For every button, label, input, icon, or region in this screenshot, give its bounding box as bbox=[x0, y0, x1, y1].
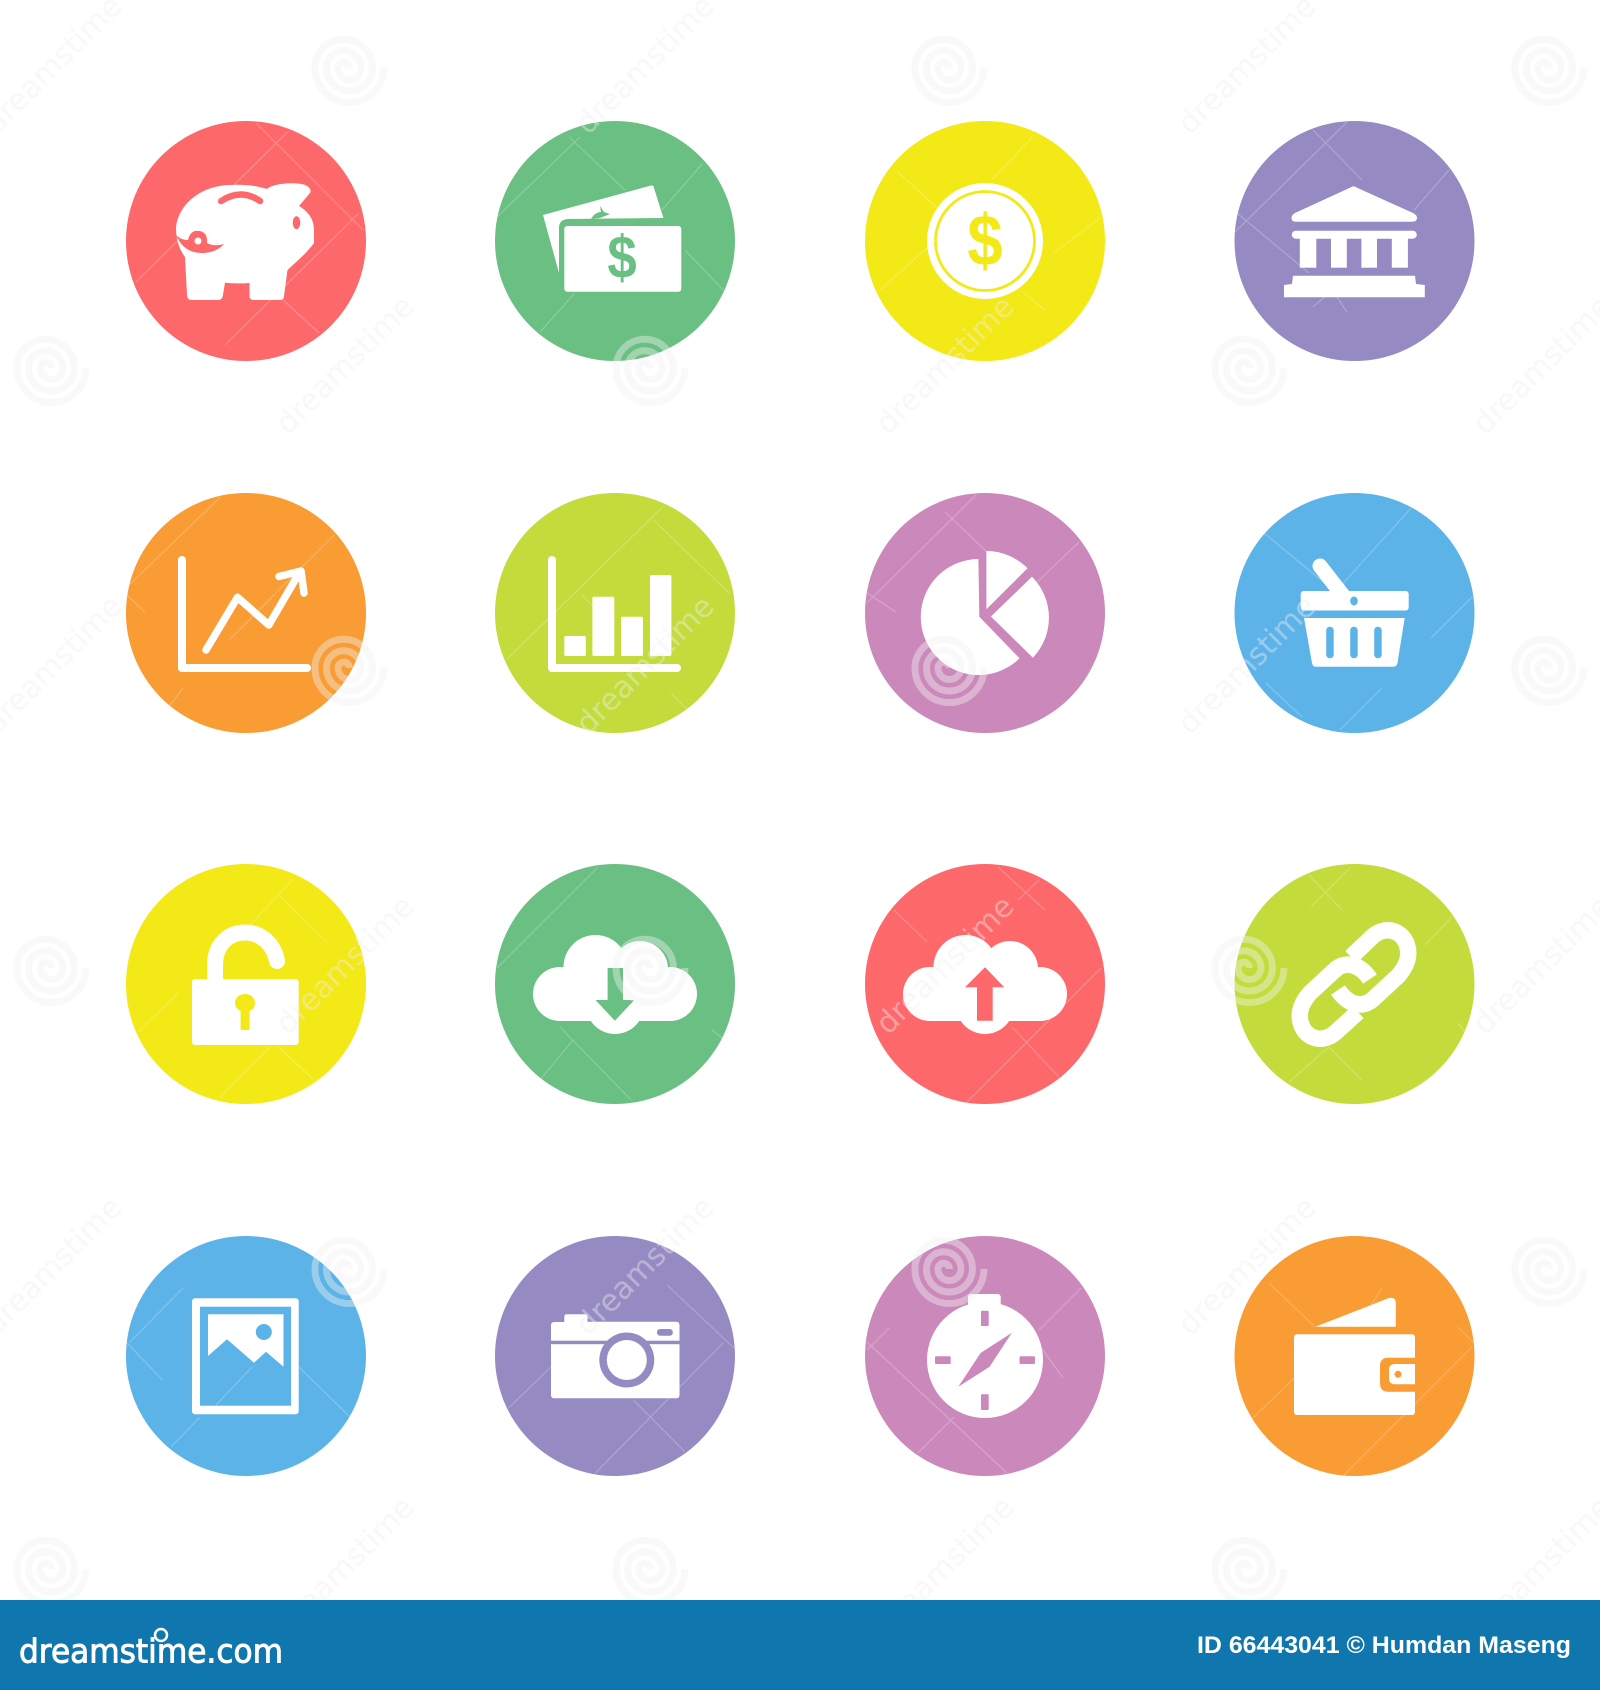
watermark: diagonal text: dreamstime bbox=[1171, 1190, 1323, 1342]
panel: pie chart bbox=[865, 493, 1105, 733]
panel: compass bbox=[865, 1236, 1105, 1476]
panel: bar chart bbox=[495, 493, 735, 733]
badge circle bbox=[865, 864, 1105, 1104]
panel: cloud upload bbox=[865, 864, 1105, 1104]
badge circle bbox=[126, 121, 366, 361]
icon: dollar coin bbox=[927, 183, 1043, 299]
badge circle bbox=[495, 121, 735, 361]
badge circle bbox=[495, 864, 735, 1104]
badge circle bbox=[1234, 493, 1474, 733]
icon: shopping basket bbox=[1301, 566, 1409, 667]
icon: framed picture bbox=[192, 1298, 299, 1414]
panel: cloud download bbox=[495, 864, 735, 1104]
badge circle bbox=[865, 493, 1105, 733]
panel: cash bbox=[495, 121, 735, 361]
icon: cloud with up arrow bbox=[903, 935, 1067, 1034]
watermark: diagonal text: dreamstime bbox=[569, 1190, 721, 1342]
watermark: diagonal text: dreamstime bbox=[1171, 589, 1323, 741]
panel: open lock bbox=[126, 864, 366, 1104]
badge circle bbox=[495, 1236, 735, 1476]
watermark: diagonal text: dreamstime bbox=[869, 289, 1021, 441]
panel: wallet bbox=[1234, 1236, 1474, 1476]
icon: rising line chart bbox=[182, 560, 307, 668]
watermark: diagonal text: dreamstime bbox=[269, 1490, 421, 1642]
panel: basket bbox=[1234, 493, 1474, 733]
icon: open padlock bbox=[192, 932, 299, 1045]
icon: banknotes bbox=[543, 185, 681, 292]
badge circle bbox=[495, 493, 735, 733]
dollar sign: $ bbox=[967, 201, 1003, 281]
panel: picture bbox=[126, 1236, 366, 1476]
dreamstime logo: dreamstime.com bbox=[19, 1632, 283, 1670]
badge circle bbox=[1234, 864, 1474, 1104]
badge circle bbox=[865, 1236, 1105, 1476]
badge circle bbox=[126, 1236, 366, 1476]
icon: chain link bbox=[1300, 930, 1408, 1039]
icon: camera bbox=[551, 1314, 680, 1398]
badge circle bbox=[126, 864, 366, 1104]
watermark: diagonal text: dreamstime bbox=[869, 1490, 1021, 1642]
panel: camera bbox=[495, 1236, 735, 1476]
panel: coin bbox=[865, 121, 1105, 361]
dollar sign: $ bbox=[607, 224, 637, 291]
badge circle bbox=[1234, 1236, 1474, 1476]
badge circle bbox=[126, 493, 366, 733]
footer bar bbox=[0, 1600, 1600, 1690]
icon: cloud with down arrow bbox=[533, 935, 697, 1034]
panel: piggy bank bbox=[126, 121, 366, 361]
panel: line chart bbox=[126, 493, 366, 733]
icon: pie chart bbox=[921, 551, 1049, 675]
badge circle bbox=[1234, 121, 1474, 361]
watermark: lattice lines bbox=[127, 122, 1474, 1475]
icon: piggy bank bbox=[176, 183, 314, 300]
panel: bank bbox=[1234, 121, 1474, 361]
watermark: diagonal text: dreamstime bbox=[269, 289, 421, 441]
badge circle bbox=[865, 121, 1105, 361]
watermark: diagonal text: dreamstime bbox=[569, 589, 721, 741]
icon: bank building bbox=[1284, 186, 1425, 297]
watermark: diagonal text: dreamstime bbox=[269, 889, 421, 1041]
icon: compass bbox=[927, 1294, 1043, 1418]
icon: bar chart bbox=[552, 560, 677, 668]
image id and credit: ID 66443041 © Humdan Maseng bbox=[1197, 1632, 1571, 1659]
watermark: diagonal text: dreamstime bbox=[869, 889, 1021, 1041]
panel: chain link bbox=[1234, 864, 1474, 1104]
icon: wallet bbox=[1294, 1298, 1415, 1415]
